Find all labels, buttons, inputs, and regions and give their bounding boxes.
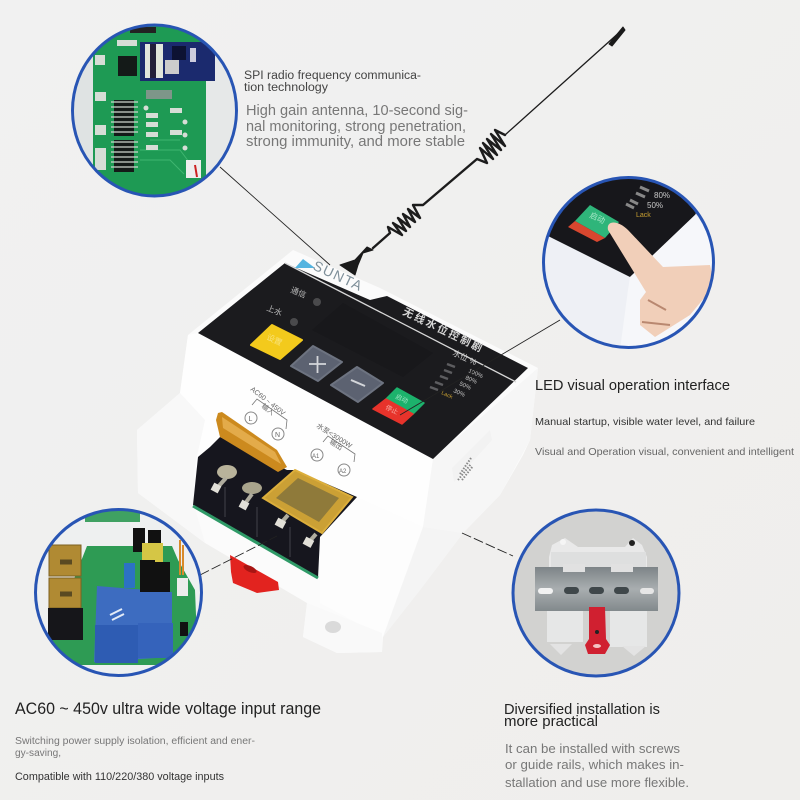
- callout text: radio: High gain antenna, 10-second sig-: [246, 103, 468, 119]
- callout text: installation: Diversified installation is: [504, 702, 660, 718]
- callout text: voltage: Compatible with 110/220/380 voltage inputs: [15, 771, 224, 783]
- indicator labels: 通信: [289, 285, 308, 300]
- callout text: voltage: gy-saving,: [15, 748, 61, 759]
- button: minus: [331, 367, 383, 402]
- input and output labels: A1: [312, 454, 320, 460]
- red clip: [585, 607, 610, 654]
- connector and wires: [180, 540, 183, 575]
- callout leader lines: [200, 167, 631, 575]
- water level scale: Lack: [440, 390, 453, 401]
- water level scale: 50%: [458, 381, 472, 392]
- button: start: [386, 388, 424, 414]
- water level scale: 水位 %: [451, 348, 478, 367]
- callout text: radio: strong immunity, and more stable: [246, 134, 465, 150]
- terminal block: [193, 437, 357, 578]
- callout text: LED interface: [535, 378, 794, 458]
- button: set: [251, 325, 302, 359]
- amber fuses: [49, 545, 81, 576]
- callout circle: finger pressing start: 50%: [647, 201, 663, 210]
- callout text: installation: stallation and use more flexible.: [505, 775, 689, 790]
- button: plus: [291, 346, 342, 381]
- input and output labels: L: [248, 416, 252, 423]
- control panel: [198, 257, 528, 459]
- callout text: LED interface: Visual and Operation visual, convenient and intelligent: [535, 446, 794, 458]
- callout text: radio: SPI radio frequency communica-: [244, 70, 421, 82]
- input and output labels: 输出: [328, 437, 345, 452]
- callout circle: power PCB: [34, 508, 203, 677]
- input and output labels: AC60 ~ 450V: [249, 386, 286, 418]
- plastic base: [549, 538, 647, 570]
- callout circle: finger pressing start: [542, 176, 715, 349]
- callout text: voltage: Switching power supply isolation, efficient and ener-: [15, 736, 255, 747]
- callout text: radio: [244, 70, 468, 150]
- callout circle: finger pressing start: 启动: [588, 210, 607, 226]
- callout text: voltage: AC60 ~ 450v ultra wide voltage input range: [15, 700, 321, 718]
- water level scale: 30%: [452, 388, 466, 399]
- start button: [575, 205, 619, 238]
- callout text: radio: nal monitoring, strong penetration,: [246, 119, 466, 135]
- chips: [118, 56, 137, 76]
- button: stop: [373, 399, 413, 424]
- callout text: voltage: [15, 700, 321, 783]
- amber fuse cover open: [216, 412, 287, 472]
- callout circle: din rail mount: [510, 505, 685, 680]
- input and output labels: [245, 386, 355, 476]
- button: set: 设置: [265, 332, 284, 348]
- button: start: 启动: [394, 392, 410, 406]
- callout text: installation: [504, 702, 689, 790]
- blue relay: [94, 586, 172, 662]
- callout circle: radio PCB: [70, 20, 240, 200]
- callout text: installation: or guide rails, which makes in-: [505, 757, 684, 772]
- button: stop: 停止: [384, 403, 400, 417]
- input and output labels: 输入: [260, 401, 276, 417]
- level leds: 80%: [654, 191, 670, 200]
- finger: [608, 222, 715, 337]
- red din clip: [230, 555, 279, 593]
- water level scale: [430, 348, 484, 401]
- callout circle: finger pressing start: Lack: [636, 212, 651, 219]
- indicator labels: 上水: [265, 303, 284, 318]
- product name: 无线水位控制剧: [401, 305, 486, 356]
- brand logo: SUNTA: [311, 257, 366, 294]
- blue radio module: [140, 42, 215, 81]
- callout text: LED interface: Manual startup, visible water level, and failure: [535, 416, 755, 428]
- callout text: installation: It can be installed with screws: [505, 741, 681, 756]
- indicator labels: [265, 285, 321, 326]
- amber fuse cover closed: [263, 470, 352, 533]
- input and output labels: 水泵<3000W: [315, 421, 354, 450]
- water level scale: 100%: [467, 368, 484, 380]
- callout text: LED interface: LED visual operation interface: [535, 378, 730, 394]
- water level scale: 80%: [464, 375, 478, 386]
- input and output labels: N: [275, 432, 280, 439]
- antenna: [340, 27, 625, 275]
- callout text: radio: tion technology: [244, 82, 328, 94]
- callout text: installation: more practical: [504, 714, 598, 730]
- device: water level controller: [137, 250, 538, 653]
- QR code label: [452, 430, 492, 482]
- capacitors: [133, 528, 145, 552]
- screw terminals: [211, 465, 316, 548]
- device body: [137, 250, 538, 653]
- input and output labels: A2: [339, 469, 347, 475]
- metal rail: [535, 567, 658, 611]
